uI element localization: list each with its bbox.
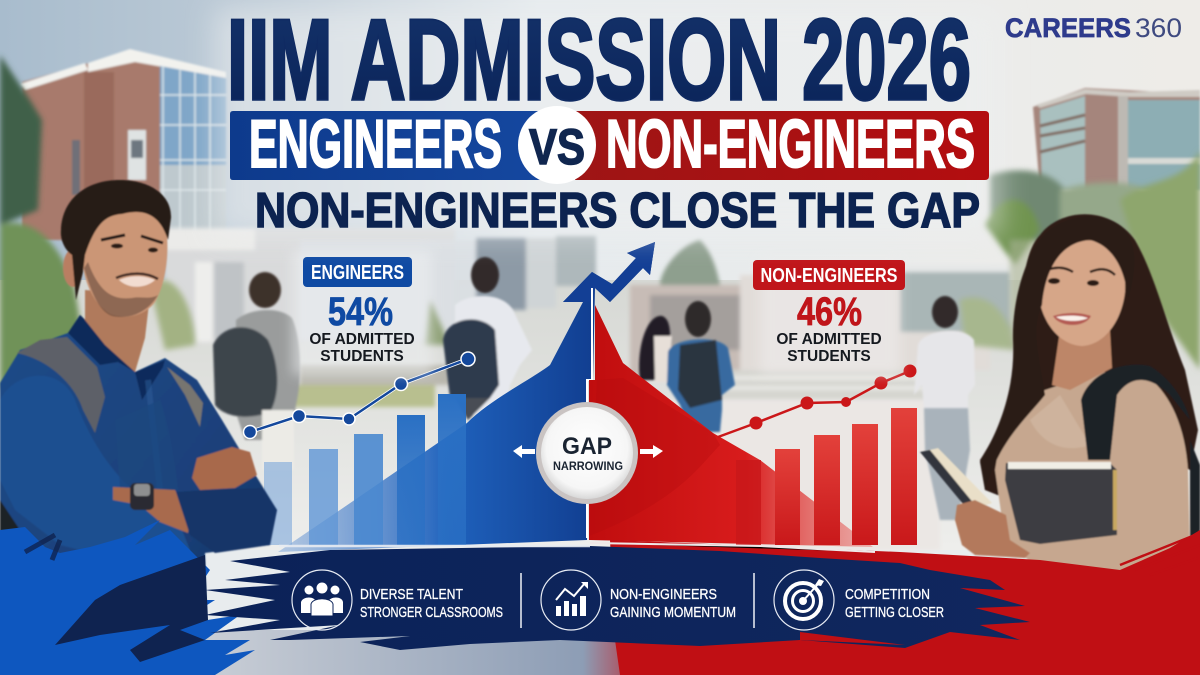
icon: target with arrow [774, 570, 834, 630]
non-engineers stat block [753, 260, 905, 375]
engineers trend line [244, 352, 475, 438]
info item: competition: COMPETITION [845, 586, 930, 603]
man backpack straps [17, 337, 105, 433]
man forearms [113, 487, 190, 533]
engineers caption: OF ADMITTED [309, 331, 415, 348]
vs disc: VS [529, 119, 585, 175]
info item: gaining momentum: GAINING MOMENTUM [610, 604, 736, 621]
woman backpack strap [1081, 365, 1190, 460]
man hair [61, 180, 171, 300]
subtitle: NON-ENGINEERS CLOSE THE GAP [255, 184, 980, 238]
woman neck [1052, 330, 1112, 390]
info item: diverse talent [292, 570, 503, 630]
arrow: right [640, 445, 663, 458]
bottom strip under brush [205, 630, 1200, 675]
gap narrowing badge: NARROWING [553, 461, 623, 473]
woman small book [921, 448, 992, 510]
student in patterned shirt [914, 296, 975, 520]
gap narrowing badge [513, 402, 663, 504]
woman face [1038, 240, 1125, 346]
right campus building [1033, 88, 1200, 190]
title panel haze [215, 8, 1000, 236]
navy brush banner [205, 543, 1030, 650]
icon: rising bar chart [541, 570, 601, 630]
red brush stroke [610, 530, 1200, 675]
campus ground [285, 365, 940, 550]
woman hair front [980, 217, 1134, 490]
background students walking [213, 257, 975, 520]
non-engineers badge: NON-ENGINEERS [760, 265, 898, 287]
non-engineers bar chart [736, 408, 917, 545]
versus banner [230, 106, 989, 184]
engineers caption: STUDENTS [320, 348, 404, 365]
logo: careers360: CAREERS [1005, 13, 1131, 43]
woman student [920, 214, 1200, 575]
woman sweater [995, 372, 1190, 575]
info item: gaining momentum: NON-ENGINEERS [610, 586, 717, 603]
student walking left with backpack [213, 272, 300, 470]
man shirt [0, 315, 277, 675]
info item: competition [774, 570, 944, 630]
info item: diverse talent: DIVERSE TALENT [360, 586, 463, 603]
man neck [85, 290, 150, 372]
couple walking [639, 301, 735, 432]
woman hair back [980, 214, 1198, 520]
engineers bar chart [264, 394, 466, 545]
non-engineers 46 percent: 46% [797, 290, 862, 334]
engineers banner [230, 106, 540, 182]
woman facial features [1045, 268, 1115, 325]
student in white shirt with backpack [443, 257, 532, 420]
icon: people group [292, 570, 352, 630]
red mountain [589, 305, 873, 547]
engineers badge: ENGINEERS [311, 262, 404, 284]
info item: gaining momentum [541, 570, 736, 630]
logo: careers360: 360 [1135, 13, 1182, 43]
blue mountain and rising arrow [278, 242, 655, 552]
engineers stat block [292, 250, 432, 375]
central campus building [630, 240, 1015, 400]
non-engineers banner [575, 106, 989, 182]
woman folder [1005, 463, 1117, 544]
non-engineers trend line [718, 364, 916, 437]
non-engineers banner: NON-ENGINEERS [606, 106, 975, 182]
woman hands [955, 500, 1030, 558]
engineers 54 percent: 54% [328, 290, 393, 334]
engineers banner: ENGINEERS [249, 106, 502, 182]
left campus building [20, 49, 226, 242]
man head [83, 205, 167, 317]
arrow: left [513, 445, 535, 458]
man watch [130, 483, 154, 510]
info item: diverse talent: STRONGER CLASSROOMS [360, 604, 503, 621]
lower left campus building [165, 228, 596, 343]
background trees [0, 55, 1200, 390]
man student [0, 180, 277, 675]
blue brush stroke [0, 520, 255, 675]
info item: competition: GETTING CLOSER [845, 604, 944, 621]
gap narrowing badge: GAP [562, 433, 612, 460]
non-engineers caption: OF ADMITTED [776, 331, 882, 348]
man backpack [0, 450, 20, 560]
vs disc [518, 106, 596, 184]
man facial features [101, 235, 163, 287]
non-engineers caption: STUDENTS [787, 348, 871, 365]
non-engineers badge [753, 260, 905, 290]
